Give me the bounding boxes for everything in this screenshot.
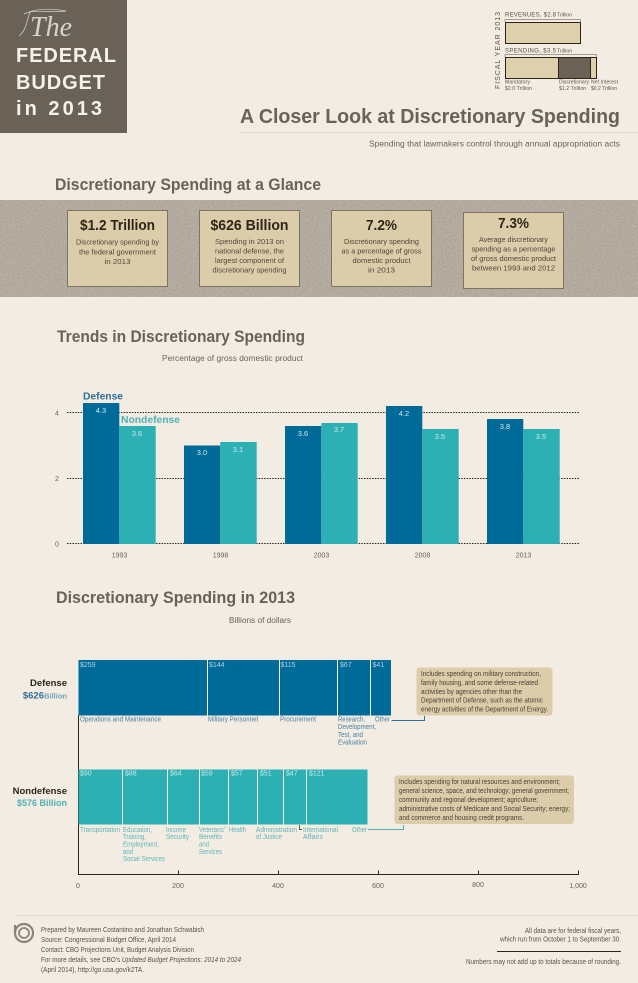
bars 2008 [386,406,459,560]
nondefense category labels: Services [199,849,222,856]
spending breakdown labels: Mandatory [505,80,530,86]
callout: nondefense other note: Includes spending for natural resources and environment; [399,779,560,786]
bar chart: defense vs nondefense share of GDP [55,392,580,560]
card: $626 Billion: largest component of [215,256,285,265]
footer: notes [466,928,621,966]
card: $1.2 Trillion [68,210,168,286]
label: Defense total [23,678,67,702]
axis: 200 [172,883,184,890]
icon: CBO logo [15,924,33,942]
nondefense bar: $88 [125,770,137,778]
spending breakdown labels: Net Interest [591,80,619,86]
connector: defense other to note [392,716,424,720]
bars 2013 [487,419,560,560]
defense bar: $115 [280,662,296,669]
title block: The Federal Budget in 2013 [0,0,127,133]
axis: 400 [272,883,284,890]
spending breakdown labels [505,80,619,92]
nondefense category labels: Veterans' [199,827,225,834]
footer: credits: (April 2014), http://go.usa.gov/k2TA. [41,967,144,974]
defense category labels: Evaluation [338,740,367,746]
title block: The Federal Budget in 2013: BUDGET [16,72,105,94]
nondefense category labels: Other [352,827,368,834]
nondefense category labels: Employment, [123,842,159,848]
spending breakdown labels: $2.0 Trillion [505,86,532,92]
revenues bar [505,12,580,44]
stacked bars chart: 2013 spending by category [13,660,587,890]
footer: credits: Source: Congressional Budget Office, April 2014 [41,937,176,944]
defense category labels: Operations and Maintenance [80,716,161,724]
callout: defense other note: energy activities of the Department of Energy. [421,706,548,714]
bars 1993: 1993 [112,552,127,560]
bars 2008: 4.2 [399,409,409,418]
card: $1.2 Trillion: the federal government [79,248,157,256]
bars 1993: 3.6 [132,429,142,438]
footer: credits: Prepared by Maureen Costantino and Jonathan Schwabish [41,927,204,934]
spending breakdown labels: $1.2 Trillion [559,86,586,92]
bars 2003: 3.7 [334,425,344,434]
nondefense category labels: International [303,827,338,834]
axis: 1,000 [569,883,587,890]
callout: defense other note [416,668,552,716]
defense category labels: Test, and [338,732,363,739]
spending breakdown labels: $0.2 Trillion [591,86,617,92]
callout: nondefense other note: administrative costs of Medicare and Social Security; energy; [399,806,570,813]
nondefense bar: $51 [260,770,272,778]
legend: Defense: Defense [83,392,123,402]
card: 7.3%: spending as a percentage [472,244,556,254]
footer: credits [41,927,241,974]
card: 7.3% [464,212,564,288]
footer: notes: which run from October 1 to September 30. [499,936,621,944]
bar chart: defense vs nondefense share of GDP: 2 [55,476,59,483]
bars 1998: 3.0 [197,448,207,457]
nondefense category labels: Security [166,834,189,841]
defense category labels: Other [375,716,391,724]
footer: credits: Contact: CBO Projections Unit, Budget Analysis Division [41,947,194,954]
spending bar: Trillion [557,48,572,54]
defense bar: $67 [340,662,352,669]
callout: nondefense other note [394,776,574,824]
label: Nondefense amount: $576 Billion [17,798,67,808]
bars 2003: 3.6 [298,429,308,438]
spending bar [505,48,596,78]
card: 7.3%: Average discretionary [479,235,548,244]
footer: credits: For more details, see CBO's Updated Budget Projections: 2014 to 2024 [41,957,241,964]
bars 2008: 2008 [415,552,430,560]
label: Defense total: Defense [30,678,67,689]
defense bar: $41 [372,662,384,669]
connector: nondefense other to note [368,825,404,830]
callout: nondefense other note: community and regional development; agriculture; [399,797,538,804]
nondefense category labels: Administration [256,827,297,834]
label: Nondefense total: Nondefense [13,786,67,797]
card: $626 Billion: Spending in 2013 on [215,237,284,246]
nondefense category labels: and [123,849,133,856]
bars 2013: 3.5 [536,432,546,441]
bars 2008: 3.5 [435,432,445,441]
defense category labels: Research, [338,716,365,724]
nondefense category labels: Affairs [303,834,323,841]
defense bar: $259 [80,662,96,669]
spending breakdown labels: Discretionary [559,80,590,86]
revenues bar: Trillion [557,12,572,18]
bars 2013: 2013 [516,552,531,560]
axis: 600 [372,883,384,890]
defense category labels [80,716,391,746]
callout: defense other note: Department of Defense, such as the atomic [421,698,543,704]
card: $626 Billion [200,210,300,286]
card: 7.2% [332,210,432,286]
nondefense category labels: Training, [123,834,146,841]
section heading: at a glance: Discretionary Spending at a Glance [55,175,321,194]
bar chart: defense vs nondefense share of GDP: 4 [55,410,59,418]
chart subtitle: Percentage of gross domestic product [162,354,304,363]
fiscal year 2013 revenue and spending mini chart: FISCAL YEAR 2013 [495,12,502,89]
axis: 0 [76,883,80,890]
nondefense category labels: Transportation [80,827,120,834]
nondefense bar: $90 [80,770,92,778]
card: 7.2%: as a percentage of gross [342,246,422,256]
footer: notes: Numbers may not add up to totals because of rounding. [466,959,621,966]
fiscal year 2013 revenue and spending mini chart [495,12,619,92]
nondefense bar [78,770,368,824]
section heading: trends: Trends in Discretionary Spending [57,327,305,346]
card: $1.2 Trillion: Discretionary spending by [76,238,159,246]
card: 7.2%: 7.2% [366,217,397,234]
card: 7.3%: of gross domestic product [471,254,557,263]
nondefense category labels: and [199,842,209,848]
nondefense bar: $57 [231,770,243,778]
card: $626 Billion: national defense, the [215,246,284,256]
card: 7.2%: Discretionary spending [344,237,419,246]
bars 2003: 2003 [314,552,329,560]
title block: The Federal Budget in 2013: in 2013 [16,98,102,120]
breakdown subtitle: Billions of dollars [229,616,291,625]
subheading: Spending that lawmakers control through annual appropriation acts [369,140,620,148]
panel: glance band with four stat cards [0,200,638,297]
callout: nondefense other note: and commerce and housing credit programs. [399,815,524,822]
bars 2003 [285,423,358,560]
nondefense category labels: Health [229,827,246,834]
nondefense category labels: Social Services [123,856,165,863]
nondefense category labels: Benefits [199,834,222,841]
nondefense bar: $59 [201,770,213,778]
title block: The Federal Budget in 2013: FEDERAL [16,45,116,67]
bar chart: defense vs nondefense share of GDP: 0 [55,542,59,548]
nondefense category labels: Income [166,827,186,834]
nondefense category labels: of Justice [256,834,282,841]
label: Defense total: Billion [44,692,67,700]
bars 1998 [184,442,257,560]
axis: 800 [472,882,484,889]
card: 7.3%: between 1993 and 2012 [472,264,555,272]
defense category labels: Military Personnel [208,716,258,724]
card: $626 Billion: $626 Billion [210,217,288,234]
bars 1993 [83,403,156,560]
callout: defense other note: family housing, and some defense-related [421,680,538,687]
section heading: spending in 2013: Discretionary Spending in 2013 [56,588,295,607]
footer: notes: All data are for federal fiscal years, [525,928,621,935]
script word: The: The [30,11,72,43]
bars 1998: 3.1 [233,445,243,454]
bars 1993: 4.3 [96,406,106,415]
axis [76,715,587,890]
nondefense category labels [80,825,368,863]
bars 1998: 1998 [213,552,228,560]
defense bar [78,660,391,716]
card: $1.2 Trillion: in 2013 [104,257,130,266]
card: $626 Billion: discretionary spending [212,266,286,274]
nondefense bar: $121 [309,770,325,778]
defense bar: $144 [209,662,225,669]
revenues bar: REVENUES, $2.8 [505,12,557,18]
callout: defense other note: Includes spending on military construction, [421,671,541,678]
card: 7.2%: domestic product [352,256,411,265]
nondefense bar: $64 [170,770,182,778]
callout: defense other note: activities by agencies other than the [421,689,522,696]
nondefense bar: $47 [286,770,298,778]
callout: nondefense other note: general science, space, and technology; general government; [399,788,569,795]
card: 7.2%: in 2013 [368,266,395,274]
nondefense category labels: Education, [123,827,152,834]
legend: Nondefense: Nondefense [121,415,180,426]
defense category labels: Procurement [280,716,316,724]
label: Defense total: $626 [23,690,44,702]
card: 7.3%: 7.3% [498,215,529,232]
card: $1.2 Trillion: $1.2 Trillion [80,217,155,234]
bars 2013: 3.8 [500,422,510,431]
defense category labels: Development, [338,724,376,731]
spending bar: SPENDING, $3.5 [505,48,557,54]
main heading: A Closer Look at Discretionary Spending [240,106,620,128]
